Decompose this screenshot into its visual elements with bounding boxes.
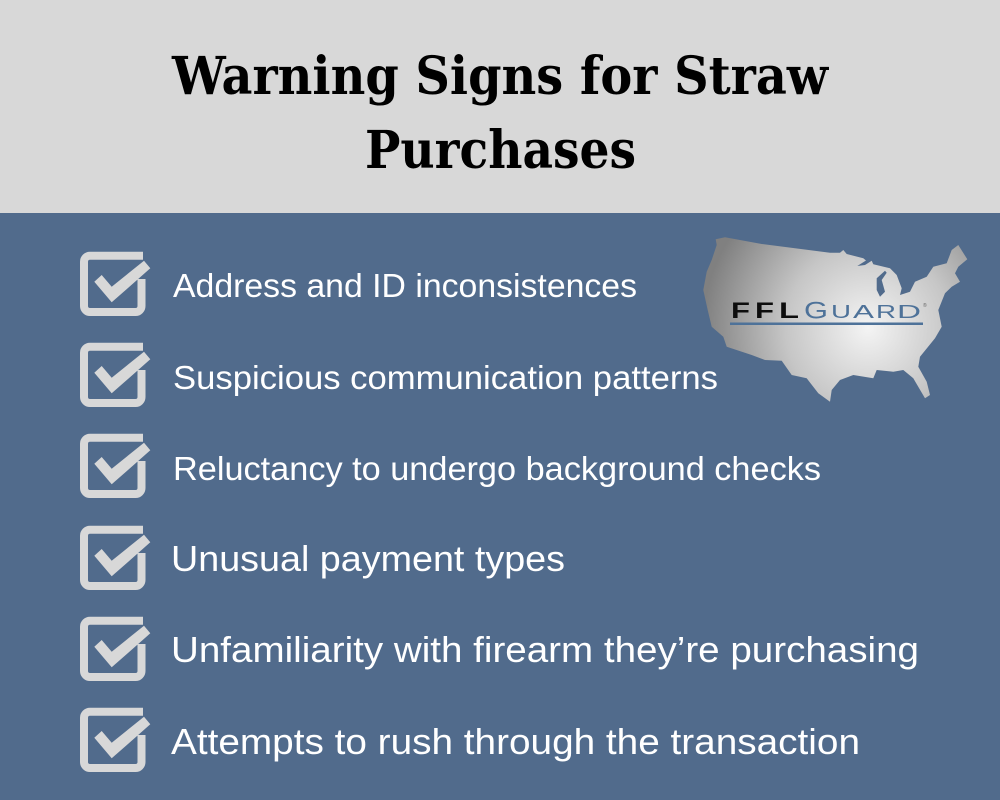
icon: checkbox — [84, 621, 150, 677]
label: Unfamiliarity with firearm they’re purchasing — [171, 629, 919, 670]
logo wordmark: A — [853, 302, 874, 322]
header band — [0, 0, 1000, 213]
icon: checkbox — [84, 438, 150, 494]
logo wordmark: ® — [923, 302, 927, 309]
item 2 — [84, 347, 718, 403]
label: Suspicious communication patterns — [173, 360, 718, 397]
background panel — [0, 213, 1000, 800]
title — [171, 46, 829, 181]
icon: checkbox — [84, 256, 150, 312]
item 5 — [84, 621, 919, 677]
icon: checkbox — [84, 712, 150, 768]
map of the United States — [703, 237, 967, 402]
title: Warning Signs for Straw — [171, 46, 829, 107]
item 1 — [84, 256, 637, 312]
logo wordmark: F — [731, 298, 750, 323]
label: Reluctancy to undergo background checks — [173, 451, 821, 488]
logo wordmark: D — [897, 302, 921, 322]
label: Attempts to rush through the transaction — [171, 721, 860, 762]
label: Unusual payment types — [171, 538, 565, 579]
logo: FFL Guard US map — [703, 237, 967, 402]
icon: checkbox — [84, 530, 150, 586]
item 4 — [84, 530, 565, 586]
logo wordmark: F — [755, 298, 774, 323]
logo wordmark: R — [876, 302, 896, 322]
icon: checkbox — [84, 347, 150, 403]
logo wordmark: L — [779, 298, 799, 323]
item 6 — [84, 712, 860, 768]
logo wordmark: G — [804, 298, 828, 324]
item 3 — [84, 438, 821, 494]
logo wordmark: U — [831, 302, 851, 322]
label: Address and ID inconsistences — [173, 268, 637, 305]
logo wordmark — [730, 298, 927, 325]
title: Purchases — [365, 120, 636, 181]
